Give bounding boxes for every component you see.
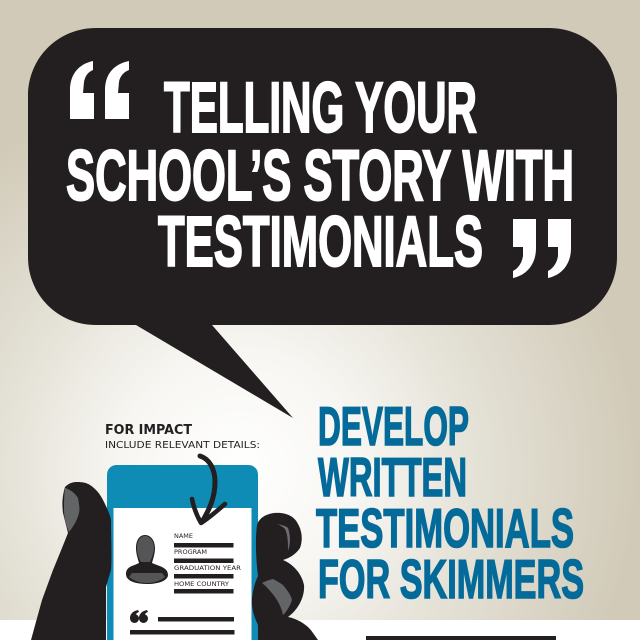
detail fields bbox=[174, 532, 242, 594]
subheading: develop written testimonials: WRITTEN bbox=[318, 446, 467, 508]
detail fields: HOME COUNTRY bbox=[174, 580, 229, 588]
hand bbox=[31, 482, 318, 640]
title bbox=[66, 69, 574, 282]
speech bubble bbox=[28, 28, 617, 418]
detail fields: GRADUATION YEAR bbox=[174, 564, 242, 572]
subheading: develop written testimonials bbox=[316, 395, 584, 610]
arrow bbox=[192, 456, 225, 523]
fingers bbox=[252, 513, 318, 640]
profile silhouette bbox=[126, 535, 168, 584]
detail fields: NAME bbox=[174, 532, 193, 540]
closing quote mark bbox=[513, 219, 571, 278]
callout: for impact bbox=[105, 422, 260, 451]
callout: for impact: INCLUDE RELEVANT DETAILS: bbox=[105, 440, 260, 451]
opening quote mark bbox=[70, 61, 129, 119]
callout: for impact: FOR IMPACT bbox=[105, 422, 193, 438]
thumb bbox=[31, 482, 111, 640]
subheading: develop written testimonials: DEVELOP bbox=[318, 395, 469, 457]
card quote mark bbox=[130, 610, 148, 623]
testimonial lines bbox=[130, 617, 234, 634]
lower black panel bbox=[366, 636, 556, 640]
phone bbox=[107, 465, 258, 640]
detail fields: PROGRAM bbox=[174, 548, 207, 556]
